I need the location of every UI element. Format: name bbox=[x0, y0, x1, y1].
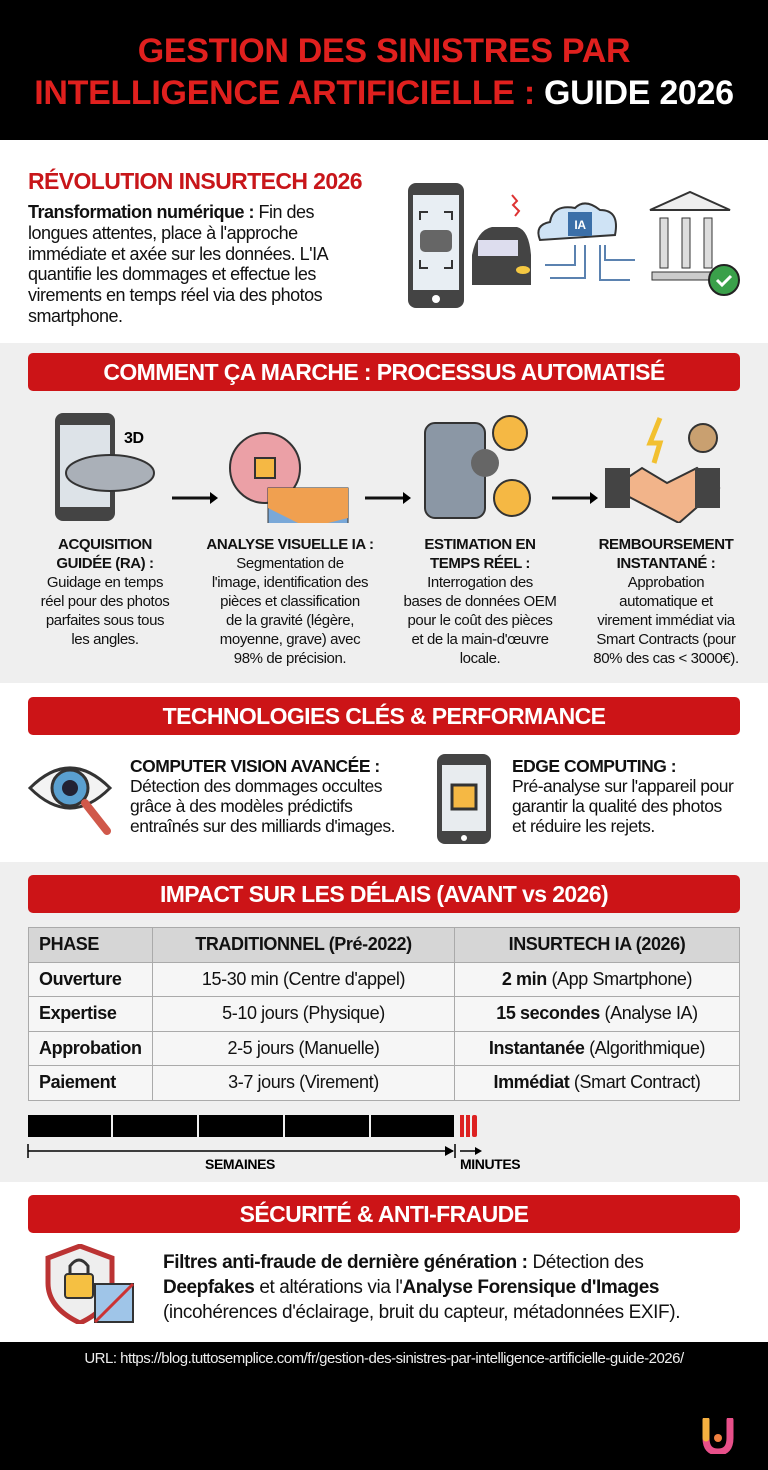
text: transformation: quantifie les dommages et effectue les bbox=[28, 264, 316, 284]
step 3 label: et de la main-d'œuvre bbox=[411, 631, 549, 648]
banner: technologies bbox=[28, 697, 740, 735]
header: INTELLIGENCE ARTIFICIELLE : GUIDE 2026 bbox=[34, 74, 734, 112]
comparison table: 15-30 min (Centre d'appel) bbox=[202, 969, 405, 989]
step 3 label: ESTIMATION EN bbox=[424, 536, 536, 553]
header bbox=[0, 0, 768, 140]
comparison table: Immédiat (Smart Contract) bbox=[493, 1072, 701, 1092]
step 4 label: automatique et bbox=[619, 593, 713, 610]
step 4 label: Approbation bbox=[628, 574, 704, 591]
text: computer vision: entraînés sur des milliards d'images. bbox=[130, 816, 395, 836]
logo bbox=[702, 1418, 734, 1454]
text: transformation: longues attentes, place à l'approche bbox=[28, 223, 298, 243]
banner: sécurité bbox=[28, 1195, 740, 1233]
step 2 label: pièces et classification bbox=[220, 593, 360, 610]
text: edge computing: EDGE COMPUTING : bbox=[512, 756, 676, 776]
step 3 label: locale. bbox=[460, 650, 500, 667]
text: transformation: Transformation numérique : Fin des bbox=[28, 202, 314, 222]
timeline bar chart: SEMAINES bbox=[205, 1156, 275, 1172]
step 4 label: virement immédiat via bbox=[597, 612, 735, 629]
timeline bar chart: MINUTES bbox=[460, 1156, 520, 1172]
comparison table: 3-7 jours (Virement) bbox=[228, 1072, 379, 1092]
step 1 label: réel pour des photos bbox=[41, 593, 169, 610]
step 2 label: 98% de précision. bbox=[234, 650, 346, 667]
banner: impact bbox=[28, 875, 740, 913]
step 4 label: INSTANTANÉ : bbox=[617, 555, 715, 572]
text: transformation: smartphone. bbox=[28, 306, 123, 326]
step 3 label: Interrogation des bbox=[427, 574, 533, 591]
banner: sécurité: SÉCURITÉ & ANTI-FRAUDE bbox=[240, 1201, 528, 1227]
comparison table: Ouverture bbox=[39, 969, 121, 989]
text: edge computing bbox=[512, 756, 734, 836]
text: computer vision: COMPUTER VISION AVANCÉE : bbox=[130, 756, 380, 776]
footer url: URL: https://blog.tuttosemplice.com/fr/gestion-des-sinistres-par-intelligence-artificielle-guide-2026/ bbox=[84, 1350, 684, 1367]
comparison table: Paiement bbox=[39, 1072, 116, 1092]
timeline bar chart bbox=[27, 1115, 520, 1172]
step 2 label: moyenne, grave) avec bbox=[220, 631, 360, 648]
text: anti-fraude bbox=[163, 1252, 680, 1323]
comparison table: Expertise bbox=[39, 1003, 116, 1023]
banner: comment ça marche: COMMENT ÇA MARCHE : PROCESSUS AUTOMATISÉ bbox=[103, 359, 665, 385]
step 1 label bbox=[41, 536, 170, 648]
text: edge computing: et réduire les rejets. bbox=[512, 816, 655, 836]
banner: impact: IMPACT SUR LES DÉLAIS (AVANT vs 2026) bbox=[160, 881, 608, 907]
icons row: 3D bbox=[124, 430, 144, 447]
step 2 label: Segmentation de bbox=[236, 555, 344, 572]
step 3 label: TEMPS RÉEL : bbox=[430, 555, 530, 572]
section: process bbox=[0, 343, 768, 683]
step 4 label: REMBOURSEMENT bbox=[599, 536, 733, 553]
illustration: phone car cloud bank: IA bbox=[574, 218, 586, 232]
step 4 label bbox=[593, 536, 739, 667]
step 1 label: ACQUISITION bbox=[58, 536, 152, 553]
step 1 label: les angles. bbox=[71, 631, 139, 648]
comparison table: Approbation bbox=[39, 1038, 142, 1058]
step 4 label: Smart Contracts (pour bbox=[596, 631, 736, 648]
comparison table: 15 secondes (Analyse IA) bbox=[496, 1003, 698, 1023]
section: impact bbox=[0, 862, 768, 1182]
step 3 label bbox=[404, 536, 556, 667]
text: edge computing: Pré-analyse sur l'appareil pour bbox=[512, 776, 733, 796]
icons row bbox=[55, 413, 720, 523]
section: intro bbox=[0, 140, 768, 343]
section: technologies bbox=[0, 683, 768, 862]
section: security bbox=[0, 1182, 768, 1342]
header: GESTION DES SINISTRES PAR bbox=[138, 32, 630, 70]
banner: technologies: TECHNOLOGIES CLÉS & PERFORMANCE bbox=[163, 703, 605, 729]
step 2 label: de la gravité (légère, bbox=[226, 612, 354, 629]
step 1 label: parfaites sous tous bbox=[46, 612, 164, 629]
step 3 label: pour le coût des pièces bbox=[407, 612, 553, 629]
text: computer vision: grâce à des modèles prédictifs bbox=[130, 796, 352, 816]
text: anti-fraude: Deepfakes et altérations via l'Analyse Forensique d'Images bbox=[163, 1277, 659, 1298]
heading: révolution insurtech: RÉVOLUTION INSURTECH 2026 bbox=[28, 168, 362, 194]
step 1 label: Guidage en temps bbox=[47, 574, 163, 591]
step 3 label: bases de données OEM bbox=[404, 593, 556, 610]
footer bbox=[0, 1342, 768, 1470]
illustration: phone car cloud bank bbox=[408, 183, 740, 308]
text: transformation: immédiate et axée sur les données. L'IA bbox=[28, 244, 328, 264]
step 1 label: GUIDÉE (RA) : bbox=[56, 555, 154, 572]
text: transformation: virements en temps réel via des photos bbox=[28, 285, 322, 305]
text: anti-fraude: (incohérences d'éclairage, bruit du capteur, métadonnées EXIF). bbox=[163, 1302, 680, 1323]
comparison table bbox=[28, 927, 740, 1101]
comparison table: 2-5 jours (Manuelle) bbox=[227, 1038, 380, 1058]
icon: phone chip bbox=[437, 754, 491, 844]
comparison table: PHASE bbox=[39, 934, 99, 954]
comparison table: TRADITIONNEL (Pré-2022) bbox=[195, 934, 412, 954]
comparison table: 2 min (App Smartphone) bbox=[502, 969, 692, 989]
text: computer vision bbox=[130, 756, 395, 836]
step 2 label: l'image, identification des bbox=[212, 574, 368, 591]
icon: shield lock image bbox=[46, 1244, 134, 1324]
step 4 label: 80% des cas < 3000€). bbox=[593, 650, 739, 667]
comparison table: INSURTECH IA (2026) bbox=[509, 934, 685, 954]
step 2 label: ANALYSE VISUELLE IA : bbox=[206, 536, 374, 553]
text: computer vision: Détection des dommages occultes bbox=[130, 776, 382, 796]
text: transformation bbox=[28, 202, 328, 326]
comparison table: 5-10 jours (Physique) bbox=[222, 1003, 385, 1023]
banner: comment ça marche bbox=[28, 353, 740, 391]
text: edge computing: garantir la qualité des photos bbox=[512, 796, 722, 816]
step 2 label bbox=[206, 536, 374, 667]
icon: eye magnifier bbox=[28, 766, 112, 835]
comparison table: Instantanée (Algorithmique) bbox=[489, 1038, 705, 1058]
text: anti-fraude: Filtres anti-fraude de dernière génération : Détection des bbox=[163, 1252, 643, 1273]
